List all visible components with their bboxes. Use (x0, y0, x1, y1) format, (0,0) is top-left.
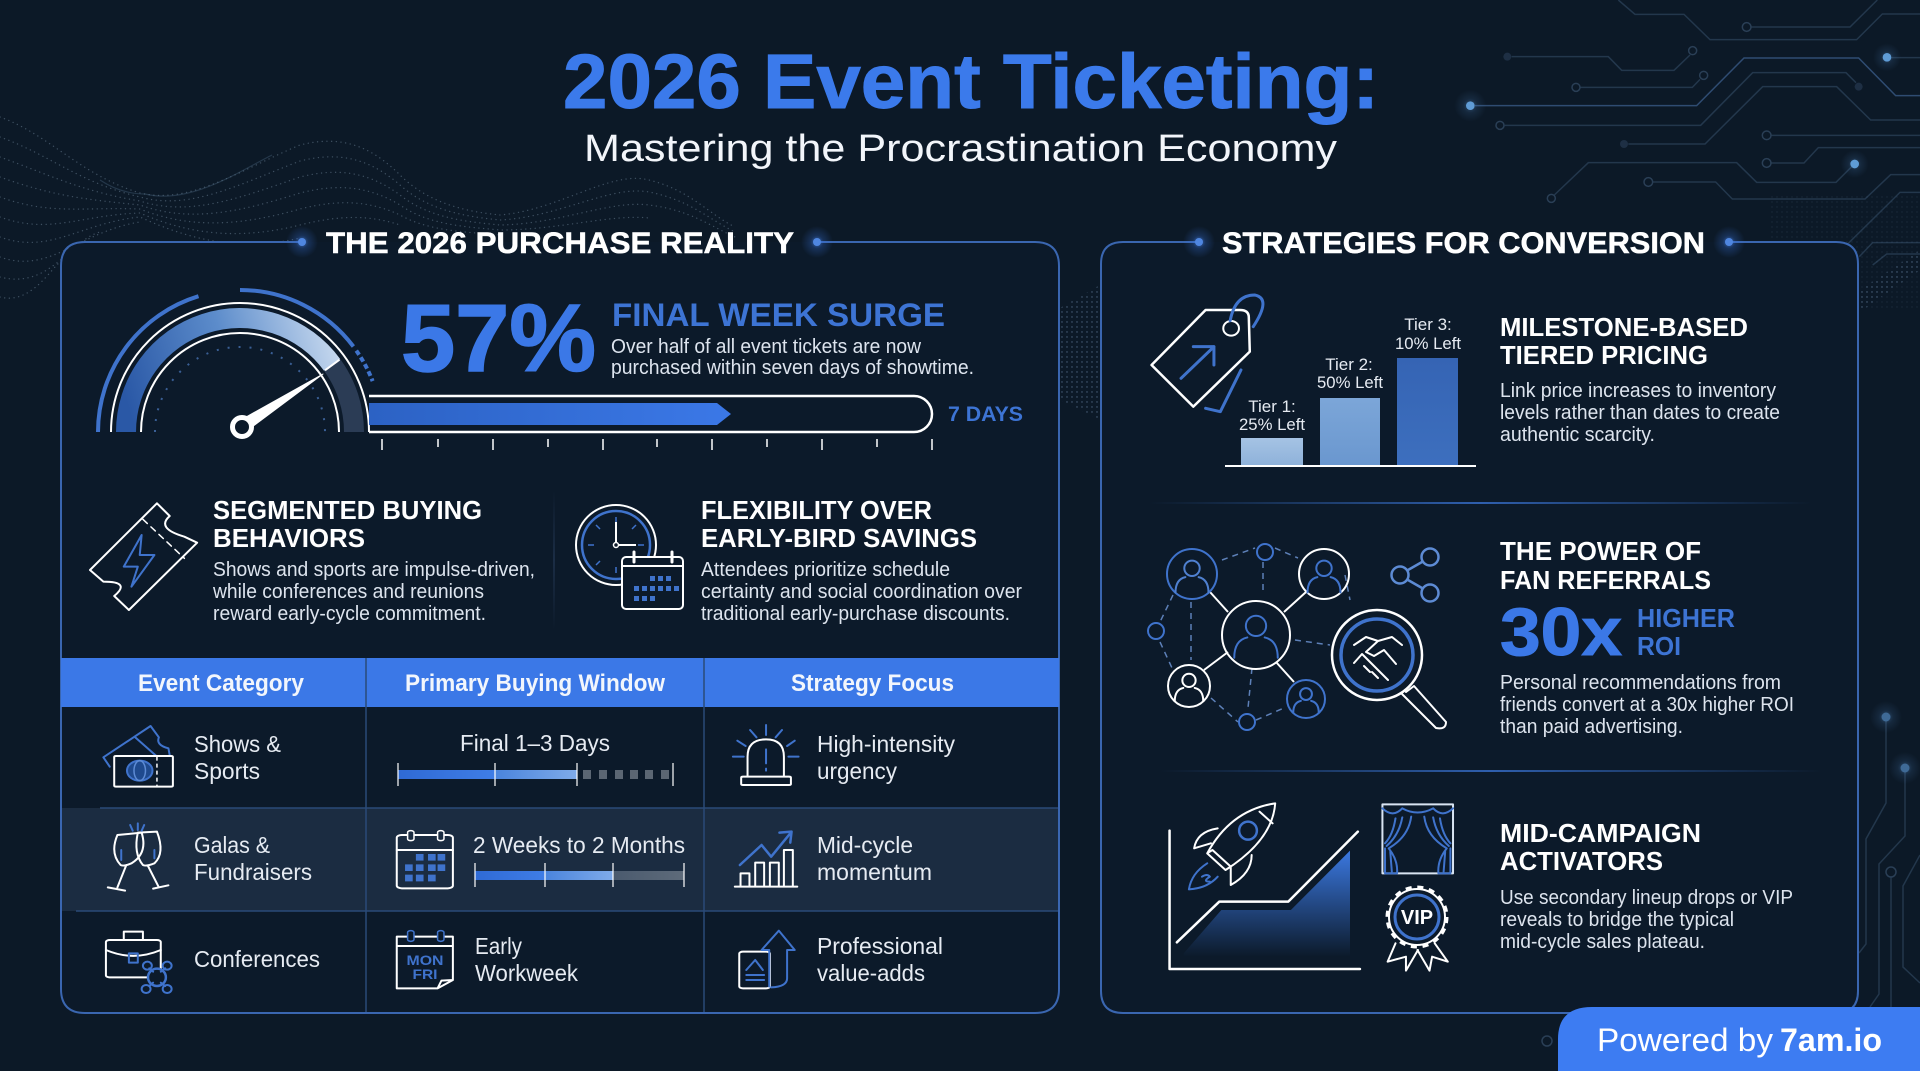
background: dotted wave left (0, 117, 735, 298)
text: shows and sports (194, 731, 281, 784)
icon: ticket with lightning bolt (90, 503, 197, 610)
text: high-intensity urgency: High-intensity (817, 731, 955, 757)
icon: calendar (397, 831, 453, 888)
label: tier 3 (1395, 315, 1461, 353)
stat: 30x higher roi: ROI (1637, 631, 1681, 661)
heading: the 2026 purchase reality: THE 2026 PURCHASE REALITY (326, 227, 794, 260)
text: mid-campaign description: Use secondary lineup drops or VIP (1500, 887, 1793, 909)
heading: milestone-based tiered pricing: MILESTONE-BASED (1500, 312, 1748, 342)
text: early workweek (475, 933, 578, 986)
panel: the 2026 purchase reality (61, 226, 1059, 1013)
heading: segmented buying behaviors: BEHAVIORS (213, 523, 365, 553)
text: milestone description (1500, 380, 1780, 446)
background: circuit traces top right (1454, 0, 1920, 265)
heading: milestone-based tiered pricing: TIERED PRICING (1500, 340, 1708, 370)
icon: workweek calendar: MON (406, 952, 444, 968)
subtitle: Mastering the Procrastination Economy (584, 128, 1337, 170)
text: professional value-adds: Professional (817, 933, 943, 959)
text: referrals description: than paid advertising. (1500, 716, 1683, 738)
label: 7 days: 7 DAYS (948, 403, 1023, 426)
text: 2 weeks to 2 months: 2 Weeks to 2 Months (473, 832, 685, 858)
heading: flexibility over early-bird savings: EARLY-BIRD SAVINGS (701, 523, 977, 553)
badge: powered by 7am.io: 7am.io (1780, 1022, 1882, 1058)
icon: show tickets (103, 726, 173, 787)
text: galas and fundraisers (194, 832, 312, 885)
icon: stage curtain (1382, 804, 1453, 873)
stat: 30x higher roi: 30x (1500, 594, 1622, 670)
icon: referral network with handshake (1148, 544, 1446, 730)
chart: tier bars (1225, 315, 1476, 466)
heading: segmented buying behaviors (213, 495, 482, 553)
text: mid-campaign description: mid-cycle sales plateau. (1500, 931, 1705, 953)
badge: powered by 7am.io (1558, 1007, 1920, 1071)
heading: the power of fan referrals: THE POWER OF (1500, 536, 1701, 566)
text: mid-campaign description (1500, 887, 1793, 953)
text: final 1-3 days: Final 1–3 Days (460, 730, 610, 756)
text: early workweek: Early (475, 933, 522, 959)
table header: event category: Event Category (138, 670, 305, 697)
text: high-intensity urgency (817, 731, 955, 784)
text: final week surge description: Over half of all event tickets are now (611, 336, 922, 358)
text: professional value-adds: value-adds (817, 960, 925, 986)
text: mid-cycle momentum: momentum (817, 859, 932, 885)
text: final week surge description (611, 336, 974, 379)
icon: share (1392, 548, 1438, 602)
label: tier 1: 25% Left (1239, 415, 1305, 434)
table: event categories and buying windows (61, 658, 1059, 1012)
icon: rocket over rising chart (1170, 803, 1360, 969)
icon: briefcase with network (106, 932, 172, 993)
text: segmented buying description (212, 559, 535, 625)
text: high-intensity urgency: urgency (817, 758, 897, 784)
icon: workweek calendar: FRI (412, 966, 438, 982)
heading: the power of fan referrals: FAN REFERRALS (1500, 565, 1711, 595)
icon: vip badge: VIP (1401, 907, 1433, 929)
text: flexibility description (701, 559, 1022, 625)
text: milestone description: levels rather than dates to create (1500, 402, 1780, 424)
heading: mid-campaign activators: MID-CAMPAIGN (1500, 818, 1701, 848)
table header: strategy focus: Strategy Focus (791, 670, 954, 697)
label: tier 1: Tier 1: (1248, 397, 1296, 416)
text: referrals description (1500, 672, 1794, 738)
icon: document and up arrow (739, 931, 795, 988)
icon: speedometer gauge (98, 290, 373, 436)
heading: the power of fan referrals (1500, 536, 1711, 595)
heading: segmented buying behaviors: SEGMENTED BUYING (213, 495, 482, 525)
text: galas and fundraisers: Fundraisers (194, 859, 312, 885)
label: tier 2 (1317, 355, 1383, 392)
stat: 57%: 57% (401, 285, 596, 392)
heading: milestone-based tiered pricing (1500, 312, 1748, 370)
badge: powered by 7am.io: Powered by (1597, 1022, 1773, 1058)
icon: workweek calendar (397, 931, 453, 988)
text: conferences: Conferences (194, 946, 320, 972)
text: milestone description: authentic scarcity. (1500, 424, 1655, 446)
text: shows and sports: Shows & (194, 731, 281, 757)
background: circuit traces bottom right (1542, 701, 1920, 1046)
text: milestone description: Link price increases to inventory (1500, 380, 1776, 402)
heading: mid-campaign activators: ACTIVATORS (1500, 846, 1663, 876)
text: mid-campaign description: reveals to bridge the typical (1500, 909, 1734, 931)
heading: strategies for conversion: STRATEGIES FOR CONVERSION (1222, 227, 1705, 260)
icon: growth chart (735, 832, 797, 887)
text: flexibility description: certainty and social coordination over (701, 581, 1022, 603)
text: galas and fundraisers: Galas & (194, 832, 270, 858)
stat: 30x higher roi (1500, 594, 1735, 670)
label: tier 2: 50% Left (1317, 373, 1383, 392)
title: 2026 Event Ticketing: (563, 39, 1379, 125)
label: tier 3: Tier 3: (1404, 315, 1452, 334)
label: tier 2: Tier 2: (1325, 355, 1373, 374)
text: flexibility description: Attendees prioritize schedule (701, 559, 950, 581)
text: early workweek: Workweek (475, 960, 578, 986)
heading: mid-campaign activators (1500, 818, 1701, 876)
panel: strategies for conversion (1101, 226, 1858, 1013)
text: segmented buying description: reward early-cycle commitment. (213, 603, 486, 625)
text: mid-cycle momentum: Mid-cycle (817, 832, 913, 858)
icon: clock and calendar (576, 505, 683, 609)
text: segmented buying description: Shows and sports are impulse-driven, (213, 559, 535, 581)
timeline bar: final days (398, 763, 673, 786)
text: flexibility description: traditional early-purchase discounts. (701, 603, 1010, 625)
text: final week surge description: purchased within seven days of showtime. (611, 357, 974, 379)
timeline bar: two weeks to two months (475, 863, 684, 887)
text: mid-cycle momentum (817, 832, 932, 885)
label: tier 1 (1239, 397, 1305, 434)
text: referrals description: Personal recommendations from (1500, 672, 1781, 694)
heading: flexibility over early-bird savings: FLEXIBILITY OVER (701, 495, 932, 525)
heading: flexibility over early-bird savings (701, 495, 977, 553)
icon: price tag with arrow (1152, 295, 1263, 412)
text: professional value-adds (817, 933, 943, 986)
label: tier 3: 10% Left (1395, 334, 1461, 353)
icon: alarm siren (733, 725, 799, 785)
text: shows and sports: Sports (194, 758, 260, 784)
text: referrals description: friends convert at a 30x higher ROI (1500, 694, 1794, 716)
heading: final week surge: FINAL WEEK SURGE (612, 297, 945, 333)
text: segmented buying description: while conferences and reunions (212, 581, 484, 603)
stat: 30x higher roi: HIGHER (1637, 603, 1735, 633)
background: dotted mesh patches right and middle (1060, 195, 1920, 420)
icon: vip badge (1388, 888, 1448, 971)
chart: seven-day progress bar (369, 396, 1023, 450)
table header: primary buying window: Primary Buying Window (405, 670, 665, 697)
icon: champagne glasses (108, 823, 168, 891)
